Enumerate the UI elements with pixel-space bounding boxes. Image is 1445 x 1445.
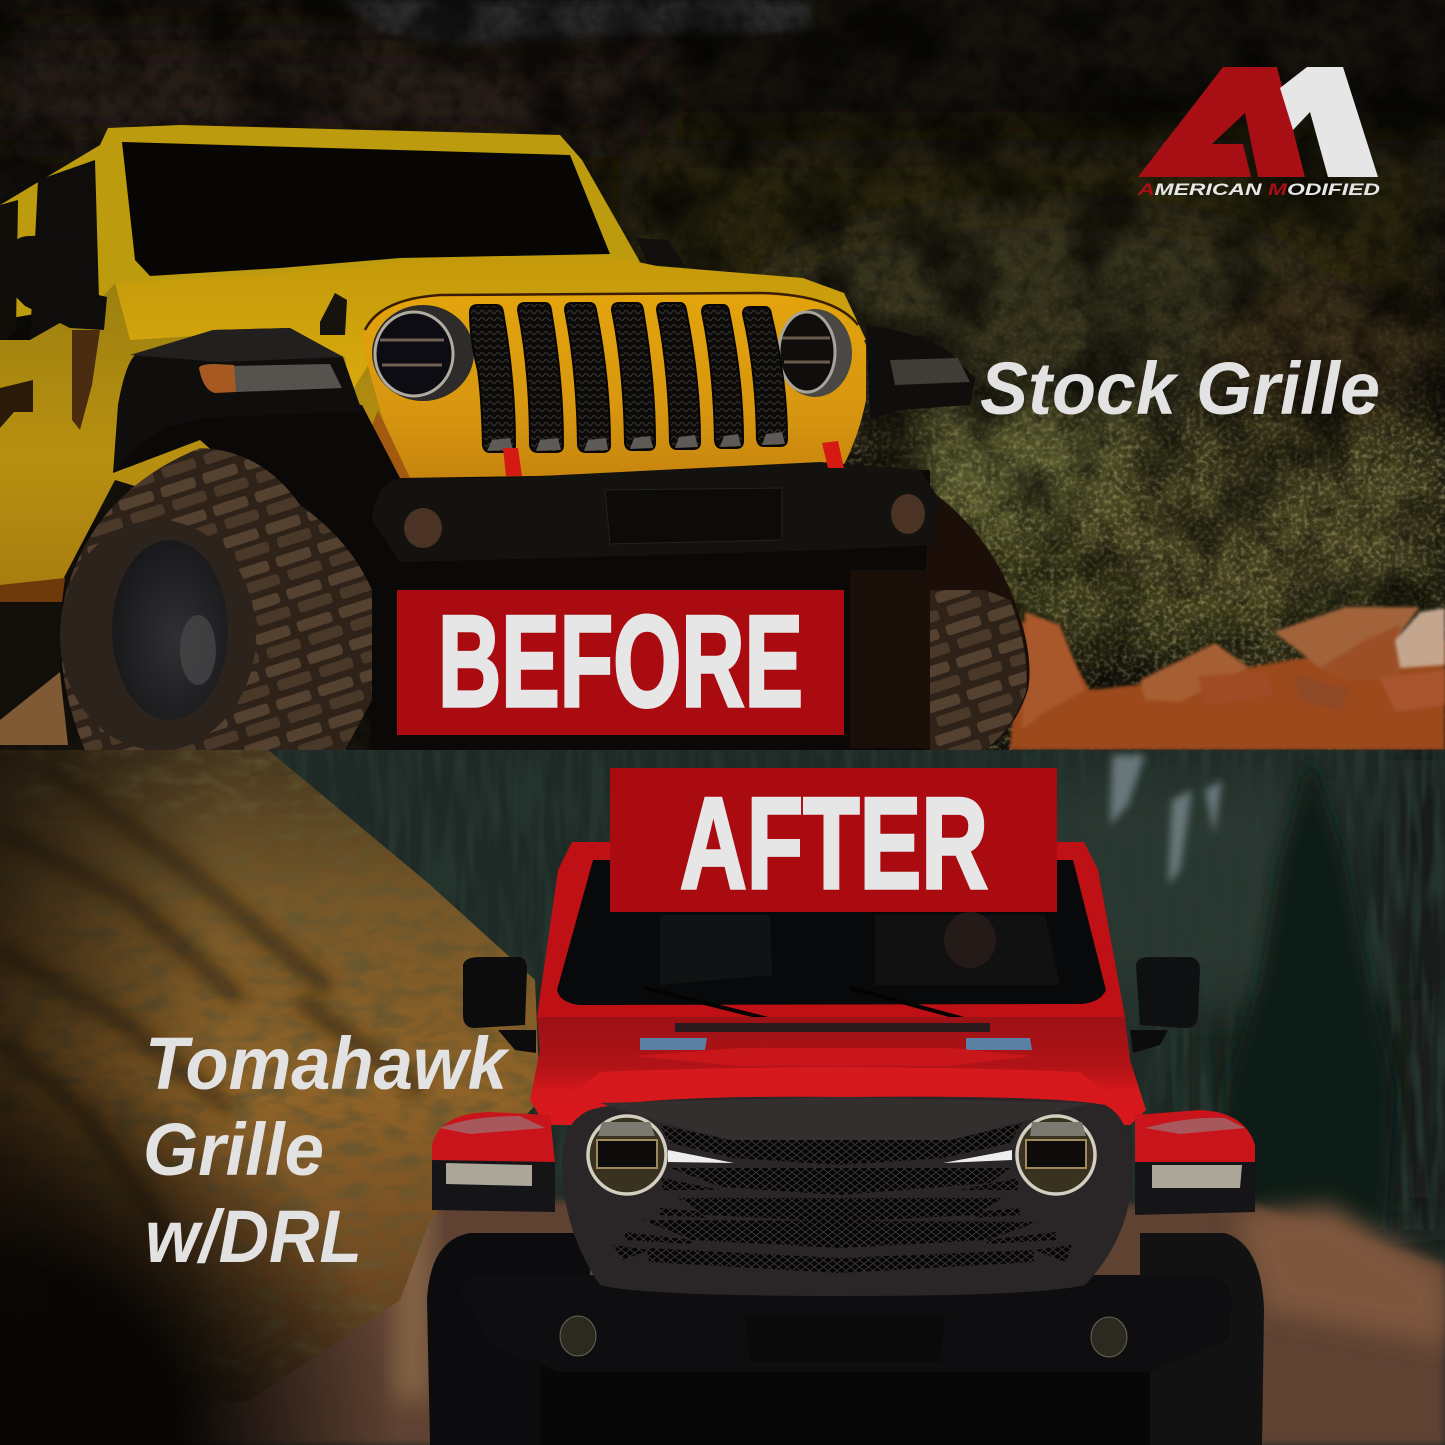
badge: before: BEFORE	[438, 588, 803, 734]
panel: before background scene	[0, 0, 1445, 750]
bumper	[372, 462, 940, 562]
grille slots	[470, 303, 787, 452]
grille panel	[362, 293, 866, 478]
label: tomahawk grille with DRL	[143, 1022, 511, 1278]
badge: before	[397, 588, 844, 735]
body side	[0, 270, 400, 585]
dirt road	[195, 1196, 1445, 1445]
bumper	[460, 1275, 1232, 1372]
hillside	[0, 750, 540, 1445]
label: tomahawk grille with DRL: Tomahawk	[145, 1022, 511, 1105]
distant snow patches	[1110, 755, 1222, 885]
logo wordmark: A MERICAN M ODIFIED	[1137, 180, 1380, 199]
cab and windshield frame	[0, 125, 640, 345]
mirrors	[463, 957, 1200, 1053]
slot louvres	[487, 432, 785, 451]
left tire	[60, 448, 372, 750]
pine tree	[1225, 755, 1395, 1235]
label: tomahawk grille with DRL: w/DRL	[145, 1195, 362, 1278]
headlight right	[778, 309, 852, 397]
door details	[72, 330, 100, 430]
badge: after: AFTER	[680, 770, 988, 916]
bushes texture	[0, 0, 1445, 674]
headlights	[588, 1116, 1095, 1194]
yellow jeep: stock	[0, 125, 1030, 750]
hood	[530, 1017, 1146, 1125]
headlight left	[372, 305, 474, 401]
panel: after background scene	[0, 750, 1445, 1445]
DRL strips	[668, 1150, 734, 1163]
right tire	[925, 490, 1030, 750]
distant sky	[340, 0, 810, 45]
tomahawk grille	[562, 1097, 1132, 1296]
under body	[540, 1290, 1150, 1445]
tires	[427, 1233, 1264, 1445]
lower frame	[850, 570, 925, 748]
mesh bands	[613, 1123, 1072, 1273]
fenders	[432, 1110, 1255, 1215]
red jeep: tomahawk grille	[427, 842, 1264, 1445]
under body shadow	[113, 400, 930, 750]
mirror	[14, 234, 107, 330]
logo A red	[1138, 67, 1305, 177]
label: tomahawk grille with DRL: Grille	[143, 1108, 324, 1191]
fenders	[113, 325, 975, 473]
hillside grass bands	[0, 750, 538, 1366]
hood	[115, 256, 866, 395]
tow hooks	[503, 448, 522, 476]
cab	[537, 842, 1125, 1026]
logo 1 white	[1280, 67, 1378, 177]
rocky ground	[1010, 607, 1445, 750]
label: stock grille: Stock Grille	[980, 347, 1380, 430]
logo: American Modified	[1137, 67, 1380, 199]
body lower trim	[0, 578, 65, 602]
vignette lower left	[0, 1078, 379, 1445]
